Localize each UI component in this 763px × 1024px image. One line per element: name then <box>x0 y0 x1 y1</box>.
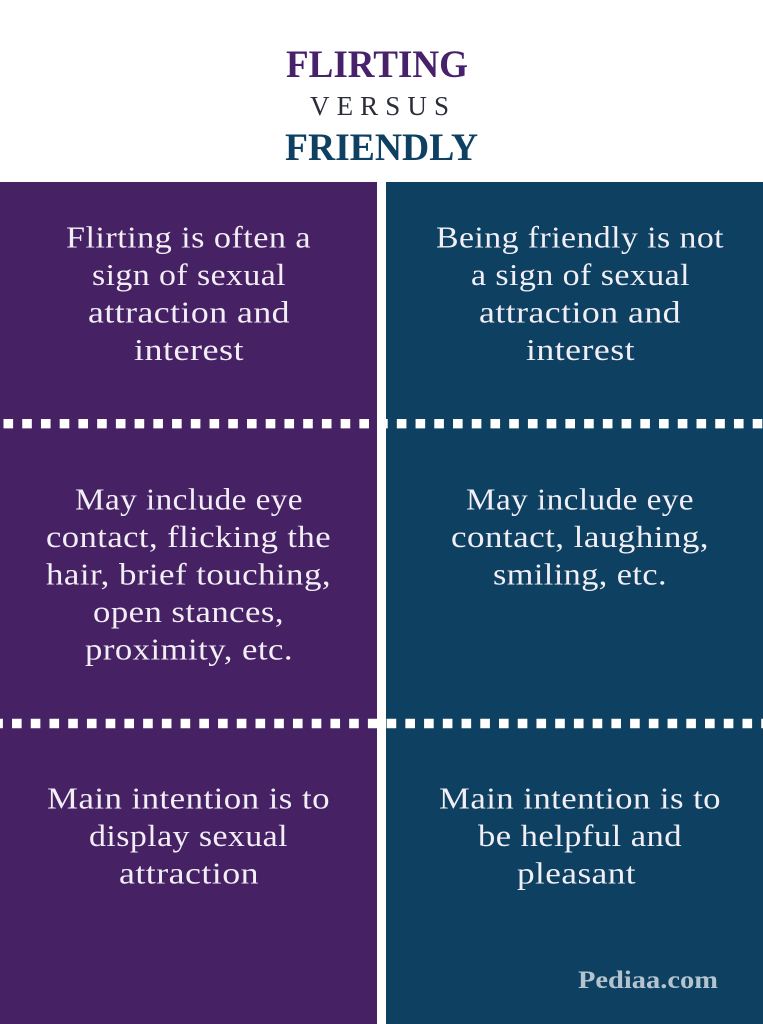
text: friendly attraction: attraction and <box>479 294 681 330</box>
text: flirting behaviours: proximity, etc. <box>85 632 293 666</box>
text: flirting intention: display sexual <box>89 818 288 853</box>
text: flirting attraction: attraction and <box>88 294 290 330</box>
text: friendly intention: be helpful and <box>478 818 682 853</box>
text: flirting intention: attraction <box>119 856 259 890</box>
title: FLIRTING <box>286 43 468 86</box>
text: friendly intention <box>439 780 721 890</box>
text: friendly attraction: a sign of sexual <box>471 257 690 292</box>
text: friendly attraction <box>436 220 724 367</box>
text: flirting behaviours: hair, brief touching, <box>46 556 331 592</box>
text: flirting behaviours: May include eye <box>75 482 303 516</box>
text: friendly behaviours: contact, laughing, <box>451 519 709 554</box>
watermark: Pediaa.com: Pediaa.com <box>578 967 718 994</box>
title: VERSUS <box>310 91 449 121</box>
text: friendly intention: pleasant <box>517 856 636 890</box>
text: friendly behaviours: May include eye <box>466 482 694 516</box>
text: friendly attraction: Being friendly is not <box>436 220 724 254</box>
title <box>285 43 478 169</box>
panel: friendly column <box>386 182 763 1024</box>
text: friendly attraction: interest <box>526 332 635 367</box>
text: flirting intention <box>47 780 330 890</box>
panel: flirting column <box>0 182 377 1024</box>
text: flirting attraction <box>66 220 311 367</box>
text: friendly behaviours: smiling, etc. <box>493 556 667 592</box>
text: flirting attraction: Flirting is often a <box>66 220 311 254</box>
text: friendly intention: Main intention is to <box>439 780 721 816</box>
text: flirting attraction: interest <box>134 332 244 367</box>
second dotted divider <box>0 719 763 728</box>
text: flirting behaviours: open stances, <box>93 594 284 629</box>
first dotted divider <box>4 419 763 428</box>
title: FRIENDLY <box>285 126 478 169</box>
text: flirting behaviours <box>46 482 331 666</box>
text: flirting behaviours: contact, flicking the <box>46 519 331 554</box>
text: flirting attraction: sign of sexual <box>92 257 286 292</box>
text: flirting intention: Main intention is to <box>47 780 330 816</box>
text: friendly behaviours <box>451 482 709 592</box>
